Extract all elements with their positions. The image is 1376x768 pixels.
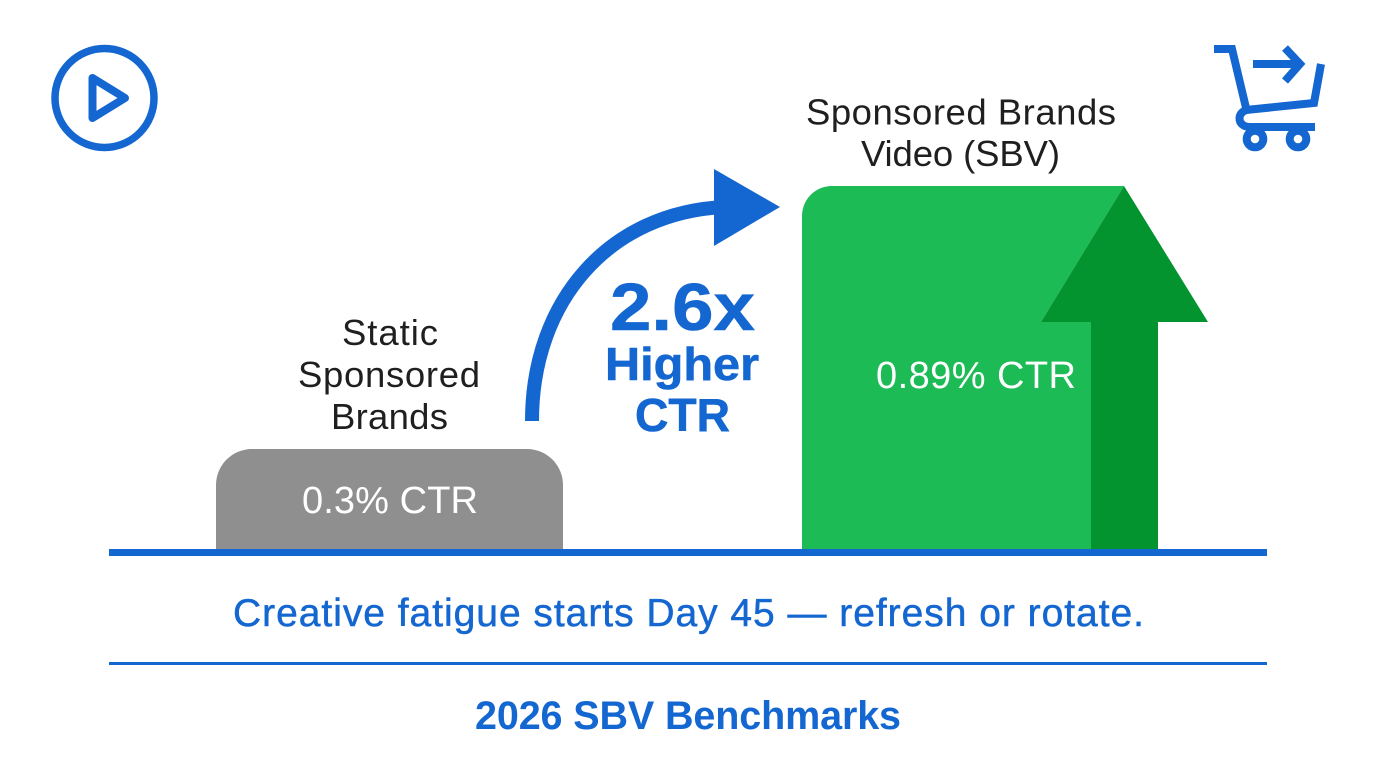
label: sponsored brands video: Video (SBV) bbox=[861, 133, 1060, 174]
takeaway text: Creative fatigue starts Day 45 — refresh or rotate. bbox=[233, 592, 1144, 635]
icon: play button bbox=[55, 48, 154, 148]
bar: sponsored brands video 0.89% CTR with growth arrow bbox=[802, 186, 1208, 550]
label: static sponsored brands: Sponsored bbox=[298, 354, 480, 395]
bar: static sponsored brands 0.3% CTR: 0.3% CTR bbox=[302, 480, 478, 522]
icon: shopping cart with arrow bbox=[1214, 48, 1321, 147]
label: static sponsored brands: Brands bbox=[331, 396, 448, 437]
callout: 2.6x higher CTR bbox=[605, 270, 759, 441]
bar: sponsored brands video 0.89% CTR with growth arrow: 0.89% CTR bbox=[876, 355, 1076, 397]
callout: 2.6x higher CTR: Higher bbox=[605, 338, 759, 390]
baseline axis bbox=[109, 549, 1267, 556]
bar: static sponsored brands 0.3% CTR bbox=[216, 449, 563, 550]
label: static sponsored brands: Static bbox=[342, 312, 438, 353]
label: static sponsored brands bbox=[298, 312, 480, 437]
callout: 2.6x higher CTR: 2.6x bbox=[610, 270, 755, 345]
curved arrow: growth from static to video bbox=[532, 169, 780, 421]
label: sponsored brands video bbox=[806, 92, 1116, 174]
label: sponsored brands video: Sponsored Brands bbox=[806, 92, 1116, 132]
callout: 2.6x higher CTR: CTR bbox=[635, 389, 730, 441]
footer title: 2026 SBV Benchmarks bbox=[475, 694, 901, 738]
